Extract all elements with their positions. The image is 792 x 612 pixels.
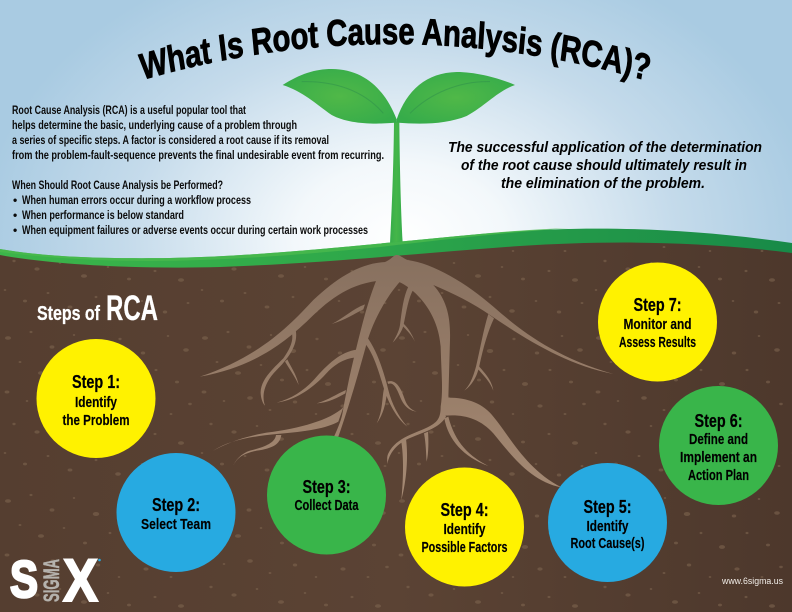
step 4: Step 4: xyxy=(440,500,488,520)
step 3 xyxy=(267,436,386,554)
intro text block: a series of specific steps. A factor is considered a root cause if its removal xyxy=(12,133,329,147)
step 6: Action Plan xyxy=(688,468,749,484)
sky background xyxy=(0,0,792,270)
intro text block: Root Cause Analysis (RCA) is a useful popular tool that xyxy=(12,103,246,117)
steps heading xyxy=(37,289,158,328)
rootlets xyxy=(401,439,407,500)
step 7: Step 7: xyxy=(634,295,682,315)
website url: www.6sigma.us xyxy=(721,576,783,586)
logo: Six Sigma xyxy=(10,547,101,612)
step 7: Assess Results xyxy=(619,335,696,351)
centre left trunk xyxy=(334,279,400,437)
when to perform list: When equipment failures or adverse events occur during certain work processes xyxy=(22,223,368,237)
italic callout: the elimination of the problem. xyxy=(501,175,705,192)
stem xyxy=(390,122,403,244)
when to perform list xyxy=(12,178,368,237)
italic callout: The successful application of the determination xyxy=(448,139,762,156)
step 6: Define and xyxy=(689,432,748,448)
lower root fork xyxy=(387,407,446,464)
step 2 xyxy=(116,453,236,572)
step 6: Step 6: xyxy=(694,411,742,431)
step 6 xyxy=(659,386,778,505)
italic callout xyxy=(448,139,762,192)
crown and right main root xyxy=(380,255,613,374)
step 3: Step 3: xyxy=(302,477,350,497)
step 5: Root Cause(s) xyxy=(570,536,645,552)
step 2: Select Team xyxy=(141,517,211,533)
step 5 xyxy=(548,463,667,582)
steps heading: RCA xyxy=(106,289,158,328)
when to perform list: • xyxy=(13,223,17,237)
lower right root xyxy=(445,398,562,487)
step 7 xyxy=(598,262,717,382)
step 1: Identify xyxy=(75,395,117,411)
step 5: Step 5: xyxy=(584,497,632,517)
when to perform list: When human errors occur during a workflow process xyxy=(22,193,251,207)
step 6: Implement an xyxy=(680,450,757,466)
right leaf xyxy=(397,72,515,124)
logo: Six Sigma: X xyxy=(63,547,98,612)
intro text block: from the problem-fault-sequence prevents the final undesirable event from recurring. xyxy=(12,148,384,162)
step 1: Step 1: xyxy=(72,372,120,392)
soil ground xyxy=(0,241,792,612)
title: What Is Root Cause Analysis (RCA)? xyxy=(138,18,650,83)
left main root xyxy=(200,259,400,377)
when to perform list: When Should Root Cause Analysis be Performed? xyxy=(12,178,223,192)
when to perform list: • xyxy=(13,208,17,222)
logo: Six Sigma: SIGMA xyxy=(39,559,64,602)
step 2: Step 2: xyxy=(152,495,200,515)
step 4: Possible Factors xyxy=(422,540,508,556)
step 3: Collect Data xyxy=(294,498,359,514)
step 1: the Problem xyxy=(62,413,130,429)
when to perform list: When performance is below standard xyxy=(22,208,184,222)
intro text block: helps determine the basic, underlying cause of a problem through xyxy=(12,118,297,132)
step 5: Identify xyxy=(586,519,628,535)
leaf veins xyxy=(302,82,490,113)
italic callout: of the root cause should ultimately result in xyxy=(461,157,747,174)
intro text block xyxy=(12,103,384,162)
step 1 xyxy=(36,339,156,458)
steps heading: Steps of xyxy=(37,303,100,325)
when to perform list: • xyxy=(13,193,17,207)
plant roots xyxy=(200,255,613,500)
left leaf xyxy=(283,69,397,124)
step 7: Monitor and xyxy=(624,317,692,333)
logo: Six Sigma: S xyxy=(10,551,38,609)
right trunk xyxy=(399,273,450,426)
step 4 xyxy=(405,468,524,586)
step 4: Identify xyxy=(444,522,486,538)
plant seedling xyxy=(283,69,515,244)
green grass band xyxy=(0,228,792,268)
